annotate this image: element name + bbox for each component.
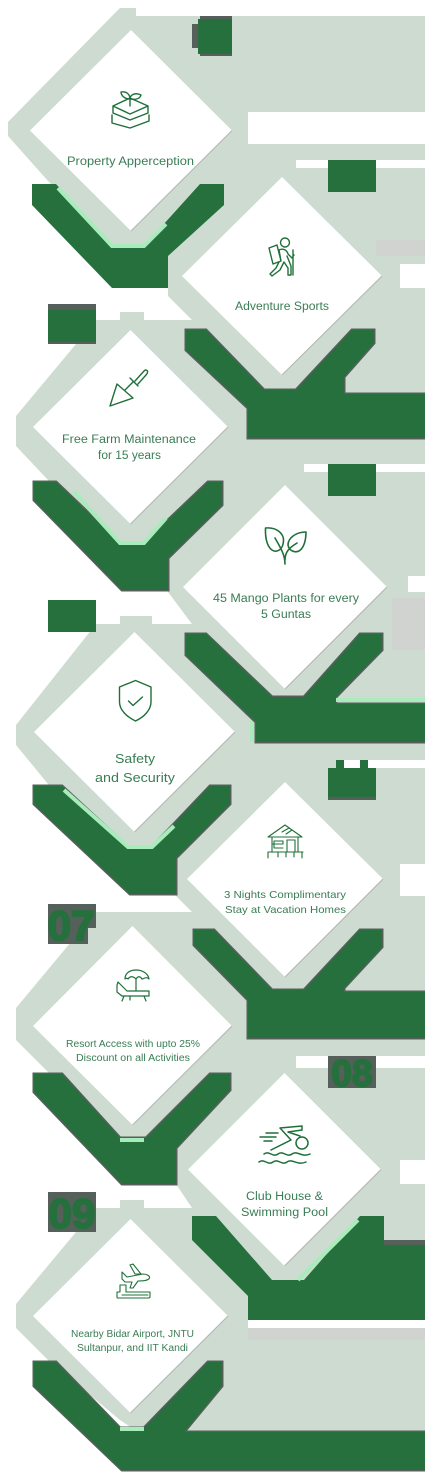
label: Free Farm Maintenance (62, 434, 196, 446)
chevron 8 band edge (384, 1240, 425, 1245)
icon: swimmer (259, 1126, 310, 1163)
chevron 2 with band (186, 330, 425, 438)
label: Resort Access with upto 25% (66, 1039, 200, 1050)
chevron 7 (34, 1074, 230, 1184)
icon: hiker (269, 238, 294, 276)
icon: two leaves (265, 528, 306, 564)
number badge 02 (328, 160, 376, 192)
number badge 04 (328, 464, 376, 496)
panel: resort access (33, 902, 232, 1184)
diamond card 5 (34, 632, 235, 832)
chevron 3 highlight (74, 492, 166, 543)
label: 45 Mango Plants for every (213, 593, 359, 605)
diamond 9 edge (130, 1316, 228, 1413)
badge 03 fill (48, 310, 96, 342)
diamond 3 edge (130, 427, 228, 524)
panel: safety and security (34, 600, 235, 894)
soft grey shading patches (248, 240, 425, 1340)
diamond 4 edge (285, 587, 387, 689)
label line 2: 5 Guntas (261, 609, 311, 621)
badge 06 lower edge (328, 797, 376, 800)
label line 2: for 15 years (98, 450, 161, 462)
diamond 8 edge (284, 1170, 381, 1266)
label line 2: and Security (95, 770, 176, 785)
chevron 7 highlight (120, 1138, 144, 1142)
label: Adventure Sports (235, 301, 329, 313)
label line 2: Sultanpur, and IIT Kandi (77, 1343, 188, 1354)
panel: adventure sports (182, 160, 425, 438)
chevron 9 highlight (120, 1427, 144, 1431)
chevron 8 with band (192, 1216, 425, 1320)
diamond card 6 (187, 782, 383, 977)
label line 2: Swimming Pool (241, 1207, 328, 1219)
label: Property Apperception (67, 156, 194, 168)
chevron 6 with band (194, 930, 425, 1038)
panel: complimentary stay (187, 760, 425, 1038)
label: Safety (115, 751, 156, 766)
label line 2: Discount on all Activities (76, 1053, 190, 1064)
chevron 3 (34, 482, 222, 590)
chevron 8 highlight (298, 1220, 358, 1280)
badge number: 08 (331, 1053, 373, 1094)
icon: beach umbrella and lounger (117, 970, 149, 1001)
diamond card 3 (33, 330, 228, 524)
diamond 7 edge (132, 1026, 232, 1125)
chevron 4 with band (186, 634, 425, 742)
diamond card 7 (33, 926, 232, 1125)
panel: free farm maintenance (33, 304, 228, 590)
badge number: 09 (49, 1190, 95, 1237)
number badge 03 (48, 304, 96, 344)
diamond card 2 (182, 177, 382, 375)
icon: airplane and terminal (117, 1264, 150, 1298)
chevron 5 (34, 786, 230, 894)
icon: vacation home (268, 825, 303, 858)
chevron 9 with band (34, 1362, 425, 1470)
number badge 07 (48, 902, 96, 949)
chevron 4 highlight (336, 698, 425, 702)
diamond 5 edge (134, 732, 235, 832)
number badge 06 (328, 760, 376, 800)
panel: nearby airport (33, 1190, 425, 1470)
diamond card 9 (33, 1219, 228, 1413)
chevron 4 corner highlight (250, 722, 254, 742)
icon: trowel (110, 370, 148, 406)
icon: sprout on soil layers (112, 92, 149, 128)
diamond card 1 (30, 30, 232, 231)
chevron 1 (32, 184, 224, 288)
diamond 6 edge (285, 879, 383, 977)
number badge 01 (192, 16, 232, 56)
diamond 1 edge (131, 130, 232, 231)
diamond card 4 (183, 485, 387, 689)
diamond card 8 (188, 1073, 381, 1266)
number badge 09 (48, 1190, 96, 1237)
badge 01 fill (198, 19, 232, 54)
label: Nearby Bidar Airport, JNTU (71, 1329, 194, 1340)
chevron 5 highlight (64, 790, 174, 847)
diamond 2 edge (282, 276, 382, 375)
badge number: 07 (48, 902, 94, 949)
white gaps on the right (248, 112, 425, 1328)
number badge 08 (328, 1053, 376, 1094)
number badge 05 (48, 600, 96, 632)
panel: property apperception (30, 16, 232, 288)
panel: club house and pool (188, 1053, 425, 1320)
panel: mango plants (183, 464, 425, 742)
chevron 1 highlight (58, 188, 166, 246)
label: Club House & (246, 1191, 323, 1203)
label line 2: Stay at Vacation Homes (225, 904, 346, 916)
icon: shield with check (120, 680, 151, 721)
label: 3 Nights Complimentary (224, 889, 347, 901)
